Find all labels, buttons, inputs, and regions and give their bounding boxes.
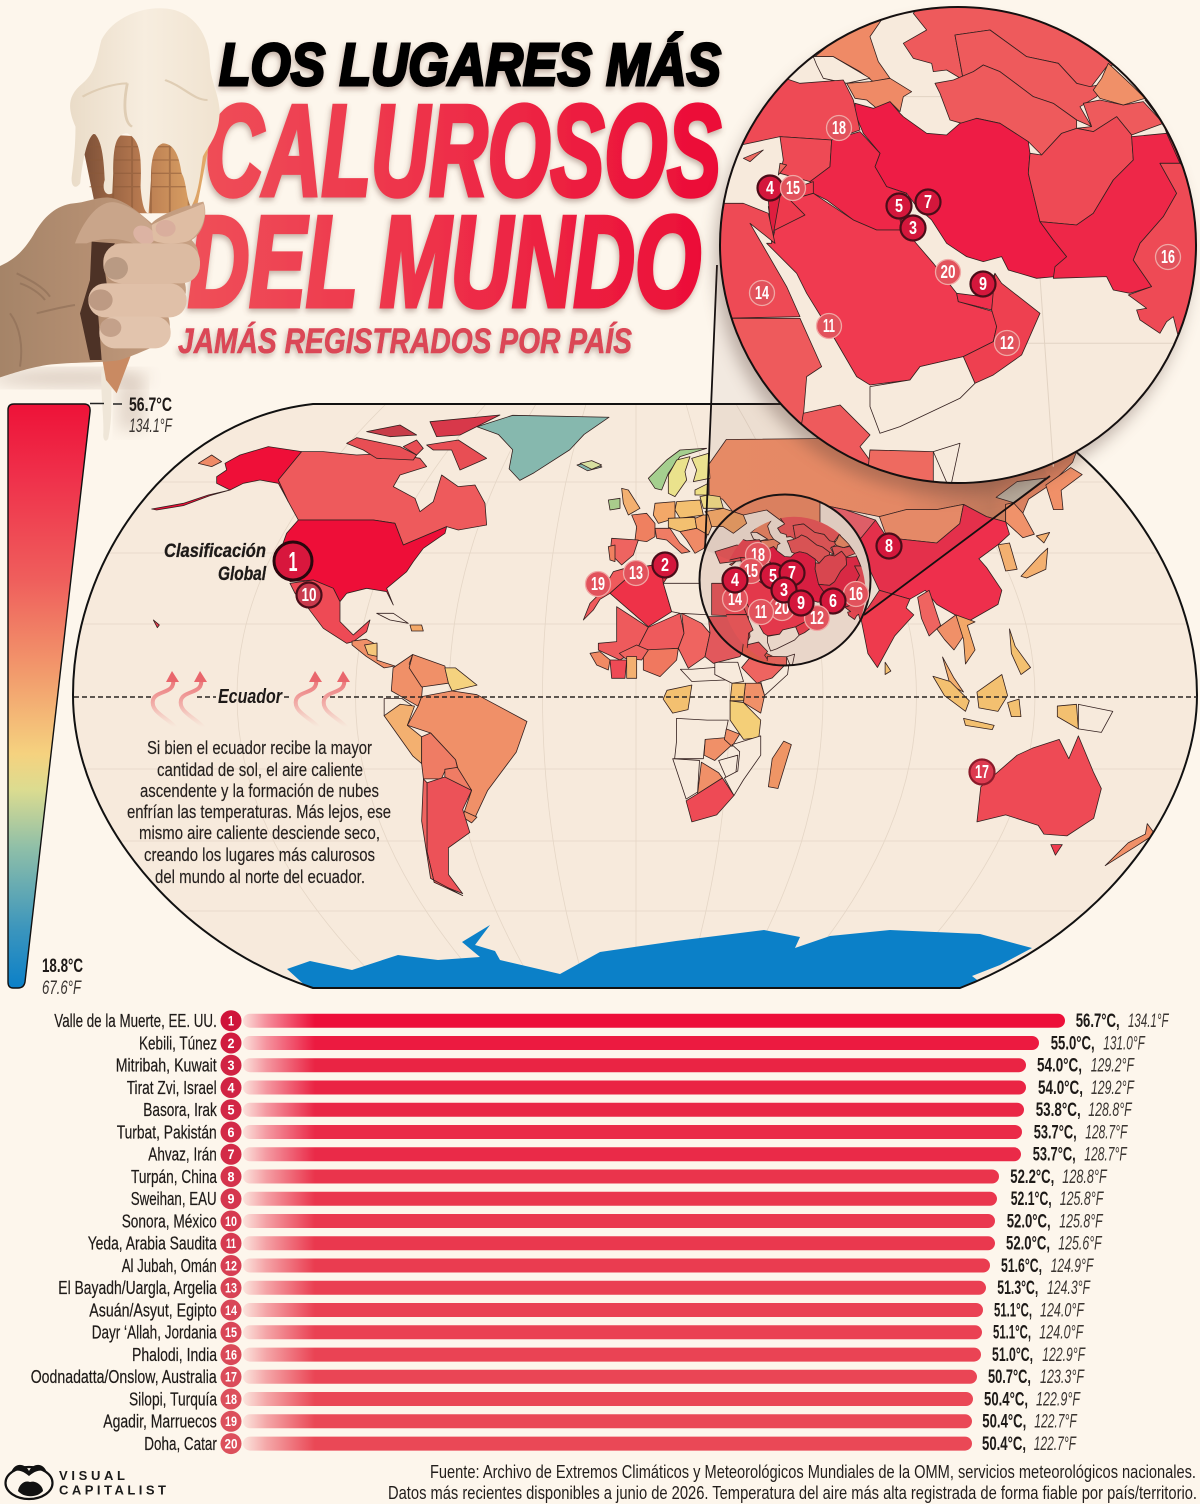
markers in magnifier: 12 [1000, 333, 1014, 353]
map rank markers: 13 [629, 563, 643, 583]
location labels: Doha, Catar [144, 1433, 217, 1454]
rank badges: 3 [228, 1058, 235, 1073]
rank badges: 16 [225, 1347, 237, 1362]
temperature gradient legend: 18.8°C [42, 956, 83, 977]
title: LOS LUGARES MÁS [219, 32, 721, 98]
markers in magnifier: 18 [832, 118, 846, 138]
location labels: Asuán/Asyut, Egipto [89, 1299, 217, 1320]
temperature values: 122.9°F [1042, 1345, 1086, 1366]
markers in magnifier: 14 [755, 283, 769, 303]
rank badges: 4 [228, 1080, 235, 1095]
temperature values: 53.8°C, [1036, 1100, 1081, 1121]
equator explanation text [127, 737, 391, 887]
temperature values: 122.7°F [1034, 1412, 1078, 1432]
location labels [31, 1010, 218, 1454]
temperature values: 128.7°F [1084, 1144, 1128, 1166]
location labels: Valle de la Muerte, EE. UU. [54, 1010, 217, 1031]
temperature values: 128.7°F [1085, 1122, 1128, 1143]
rank badges: 18 [225, 1392, 237, 1407]
markers in magnifier: 16 [1161, 247, 1175, 267]
map rank markers: 8 [885, 536, 893, 556]
location labels: Dayr ‘Allah, Jordania [92, 1322, 217, 1342]
map rank markers: 14 [728, 589, 742, 609]
rank badges: 5 [228, 1102, 235, 1118]
markers in magnifier: 4 [766, 178, 774, 198]
temperature values: 124.9°F [1051, 1256, 1094, 1277]
location labels: Sweihan, EAU [131, 1188, 217, 1209]
rank badges: 17 [225, 1370, 237, 1385]
rank badges: 10 [225, 1214, 237, 1229]
temperature gradient legend: 134.1°F [129, 416, 173, 437]
location labels: Oodnadatta/Onslow, Australia [31, 1366, 217, 1387]
location labels: Turbat, Pakistán [117, 1121, 217, 1142]
markers in magnifier: 9 [979, 274, 987, 294]
temperature values: 51.1°C, [994, 1300, 1032, 1321]
temperature values: 125.8°F [1059, 1211, 1104, 1232]
temperature values: 124.0°F [1040, 1300, 1085, 1321]
rank badges: 20 [224, 1436, 238, 1451]
equator line: Ecuador [218, 686, 283, 708]
location labels: Tirat Zvi, Israel [127, 1077, 217, 1098]
temperature values: 125.6°F [1058, 1234, 1103, 1254]
temperature values: 129.2°F [1091, 1078, 1135, 1099]
temperature values: 51.0°C, [992, 1345, 1033, 1366]
rank badges: 13 [225, 1281, 237, 1296]
location labels: Turpán, China [131, 1166, 218, 1187]
source note [388, 1462, 1197, 1503]
map rank markers: 3 [780, 580, 788, 600]
map rank markers: 12 [810, 608, 824, 628]
temperature values: 124.3°F [1047, 1278, 1091, 1299]
temperature values: 52.2°C, [1010, 1167, 1054, 1188]
title: DEL MUNDO [188, 190, 701, 334]
title [178, 32, 721, 361]
location labels: Al Jubah, Omán [122, 1255, 217, 1276]
equator explanation text: cantidad de sol, el aire caliente [157, 759, 363, 780]
markers in magnifier: 20 [940, 262, 956, 282]
map rank markers: 18 [751, 545, 765, 565]
map rank markers: 11 [755, 602, 767, 622]
map: Europe and North Africa [580, 448, 750, 678]
rank badges: 11 [226, 1236, 236, 1251]
map rank markers: 17 [975, 762, 989, 782]
rank badges: 8 [228, 1169, 235, 1184]
map rank markers: 4 [731, 570, 739, 590]
temperature values: 50.4°C, [984, 1389, 1028, 1410]
small lens over the Middle East [698, 494, 872, 666]
map: North America [152, 415, 500, 643]
temperature values: 125.8°F [1060, 1189, 1104, 1210]
icon: hand holding a melting ice cream cone [0, 8, 220, 441]
location labels: El Bayadh/Uargla, Argelia [58, 1277, 217, 1298]
temperature values: 51.3°C, [997, 1278, 1038, 1299]
equator explanation text: Si bien el ecuador recibe la mayor [147, 737, 372, 758]
equator explanation text: ascendente y la formación de nubes [140, 780, 379, 801]
map rank markers: 5 [769, 566, 777, 586]
rank badges: 7 [228, 1147, 234, 1162]
title: JAMÁS REGISTRADOS POR PAÍS [178, 322, 632, 361]
location labels: Yeda, Arabia Saudita [88, 1232, 217, 1254]
location labels: Phalodi, India [132, 1344, 218, 1365]
temperature values: 52.1°C, [1011, 1189, 1052, 1210]
temperature values: 123.3°F [1040, 1367, 1085, 1388]
rank badges: 15 [225, 1325, 237, 1340]
location labels: Silopi, Turquía [129, 1388, 218, 1409]
temperature values: 54.0°C, [1038, 1078, 1083, 1099]
markers in magnifier: 11 [823, 316, 835, 336]
temperature values: 129.2°F [1091, 1056, 1135, 1076]
temperature values: 56.7°C, [1076, 1011, 1120, 1032]
equator explanation text: mismo aire caliente desciende seco, [139, 822, 380, 843]
markers in magnifier: 15 [786, 178, 800, 198]
rank badges: 19 [225, 1414, 237, 1429]
rank badges: 12 [225, 1258, 237, 1273]
temperature values: 54.0°C, [1037, 1056, 1082, 1076]
temperature values: 122.9°F [1036, 1389, 1081, 1410]
temperature values: 50.4°C, [982, 1412, 1026, 1432]
location labels: Sonora, México [122, 1210, 217, 1231]
markers in magnifier: 7 [924, 192, 932, 212]
magnified Middle East panel [710, 0, 1200, 495]
temperature values: 52.0°C, [1006, 1234, 1050, 1254]
equator explanation text: del mundo al norte del ecuador. [155, 866, 365, 887]
rank badges [220, 1010, 242, 1454]
map: South America and Greenland [352, 415, 609, 896]
rank badges: 2 [228, 1036, 234, 1051]
temperature gradient legend: 67.6°F [42, 978, 82, 999]
title: CALUROSOS [205, 79, 721, 223]
rank badges: 9 [228, 1192, 234, 1207]
temperature values: 55.0°C, [1051, 1033, 1095, 1054]
temperature values: 128.8°F [1088, 1100, 1133, 1121]
icon: Visual Capitalist logo: CAPITALIST [59, 1482, 166, 1498]
temperature values: 122.7°F [1034, 1434, 1077, 1455]
map rank markers: 10 [302, 585, 316, 605]
global ranking label: Clasificación [164, 541, 266, 562]
map rank markers: 7 [788, 563, 796, 583]
map rank markers: 15 [744, 561, 758, 581]
world map [73, 404, 1200, 990]
icon: rising heat arrows [153, 671, 350, 727]
global ranking label [164, 541, 267, 585]
temperature values: 50.4°C, [982, 1434, 1026, 1455]
rank badges: 1 [228, 1014, 234, 1028]
map rank markers: 2 [661, 555, 669, 575]
equator explanation text: enfrían las temperaturas. Más lejos, ese [127, 801, 391, 822]
temperature values: 53.7°C, [1033, 1144, 1076, 1166]
temperature values: 52.0°C, [1007, 1211, 1051, 1232]
icon: Visual Capitalist logo [6, 1465, 166, 1499]
rank badges: 6 [228, 1125, 235, 1140]
temperature values: 131.0°F [1103, 1033, 1146, 1054]
map rank markers: 9 [797, 593, 805, 613]
equator explanation text: creando los lugares más calurosos [144, 844, 375, 865]
location labels: Kebili, Túnez [139, 1032, 217, 1053]
temperature gradient legend: 56.7°C [129, 395, 172, 416]
map rank markers: 6 [829, 591, 837, 611]
temperature values: 51.1°C, [993, 1322, 1031, 1344]
markers in magnifier [750, 116, 1180, 356]
map: Antarctica [287, 925, 1032, 990]
temperature values: 134.1°F [1128, 1011, 1169, 1032]
location labels: Mitribah, Kuwait [116, 1054, 217, 1076]
temperature values [982, 1011, 1169, 1455]
location labels: Basora, Irak [143, 1099, 217, 1120]
location labels: Ahvaz, Irán [148, 1144, 217, 1164]
map rank markers: 19 [591, 574, 605, 594]
map rank markers: 20 [774, 598, 790, 618]
temperature values: 124.0°F [1039, 1322, 1084, 1344]
ranking bar chart [240, 1008, 1065, 1458]
map rank markers: 16 [849, 584, 863, 604]
map rank markers [274, 534, 994, 784]
markers in magnifier: 3 [909, 218, 917, 238]
temperature values: 51.6°C, [1001, 1256, 1042, 1277]
global ranking label: Global [218, 564, 267, 585]
temperature values: 53.7°C, [1034, 1122, 1077, 1143]
markers in magnifier: 5 [895, 196, 903, 216]
temperature values: 50.7°C, [988, 1367, 1031, 1388]
temperature gradient legend [8, 395, 173, 999]
temperature values: 128.8°F [1062, 1167, 1108, 1188]
location labels: Agadir, Marruecos [103, 1410, 217, 1432]
map: Russia, Asia, Oceania and southern Africa [663, 436, 1155, 866]
icon: Visual Capitalist logo: VISUAL [59, 1468, 125, 1483]
map rank markers: 1 [288, 546, 298, 577]
magnifier connector lines [705, 245, 1050, 615]
rank badges: 14 [225, 1303, 237, 1318]
